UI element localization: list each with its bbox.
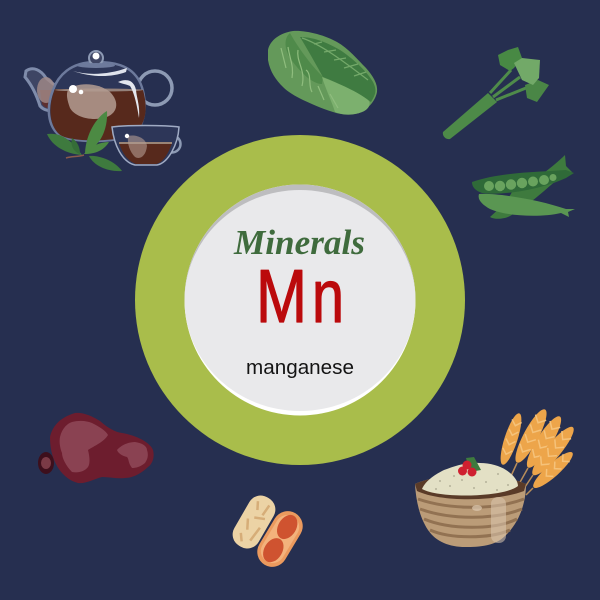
heading: Minerals: Minerals [233,223,365,262]
icon: peanuts [228,491,308,572]
peanut in shell [228,491,280,553]
element name: manganese: manganese [246,357,354,379]
panel: central plate [135,135,465,465]
element symbol: Mn: M [256,254,307,338]
icon: green peas [472,155,575,219]
wheat stalks [496,406,579,495]
opened peanut [252,506,308,572]
icon: bowl of porridge with wheat [415,406,579,547]
icon: teapot and cup of tea [25,51,180,171]
element symbol: Mn: n [312,254,344,338]
icon: liver [38,413,154,483]
highlight [491,497,506,543]
icon: napa cabbage [268,31,377,115]
bowl [415,475,526,547]
berries [466,457,481,472]
icon: celery [443,47,549,139]
porridge [422,463,518,495]
